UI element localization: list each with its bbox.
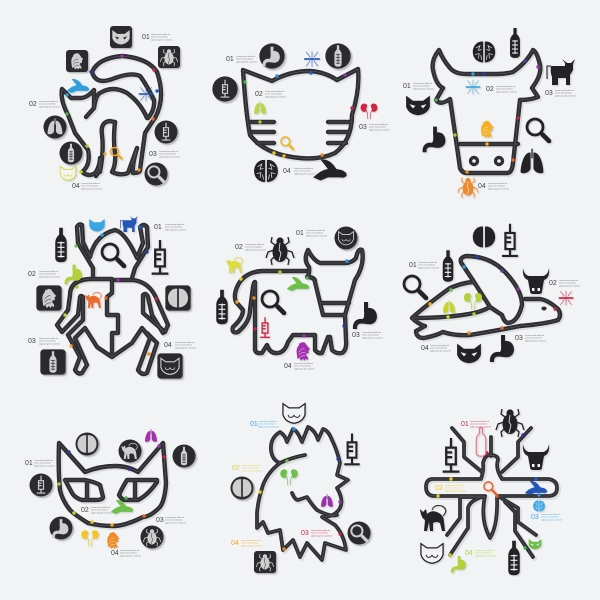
label 03: 03 — [545, 90, 553, 97]
label 03: adipiscing elit, nonumm — [541, 518, 562, 521]
panel: cow — [216, 226, 383, 370]
label 01 — [250, 420, 279, 428]
label 02: 02 — [435, 485, 443, 492]
label 02: Lorem ipsum dolor sit — [91, 506, 111, 509]
label 04: 04 — [283, 168, 291, 175]
label 02 — [486, 85, 517, 93]
label 01 — [409, 261, 439, 269]
label 01: 01 — [226, 56, 234, 63]
label 02: 02 — [486, 86, 494, 93]
icon: brain — [473, 42, 495, 62]
route markers — [63, 225, 158, 356]
label 03: amet, consectetuer — [555, 92, 572, 95]
label 01: 01 — [409, 262, 417, 269]
icon: lungs — [321, 494, 333, 507]
label 03 — [531, 513, 562, 521]
icon: stomach — [423, 127, 445, 152]
label 04 — [72, 182, 102, 190]
icon: rooster badge — [36, 285, 63, 312]
label 03 — [149, 150, 180, 158]
label 04: 04 — [111, 550, 119, 557]
label 01 — [296, 229, 327, 237]
label 04 — [465, 549, 496, 557]
icon: bottle badge — [60, 142, 84, 166]
icon: bottle — [216, 290, 228, 324]
label 03: amet, consectetuer — [369, 126, 386, 129]
label 02: Lorem ipsum dolor sit — [445, 484, 465, 487]
line drawing: rooster head — [257, 427, 350, 562]
label 01: amet, consectetuer — [258, 423, 275, 426]
icon: bottle outline — [476, 428, 486, 456]
icon: turtle — [111, 500, 133, 514]
label 01: Lorem ipsum dolor sit — [236, 55, 256, 58]
label 04: adipiscing elit, nonumm — [81, 187, 102, 190]
icon: stomach — [353, 302, 377, 329]
icon: mosquito — [304, 51, 320, 67]
label 03: adipiscing elit, nonumm — [525, 339, 546, 342]
label 02: amet, consectetuer — [496, 88, 513, 91]
label 01: amet, consectetuer — [413, 85, 430, 88]
label 03: adipiscing elit, nonumm — [362, 336, 383, 339]
label 04: amet, consectetuer — [430, 347, 447, 350]
label 03: Lorem ipsum dolor sit — [525, 334, 545, 337]
icon: cat face — [457, 344, 481, 363]
label 04: adipiscing elit, nonumm — [430, 349, 451, 352]
label 04 — [231, 539, 262, 547]
label 01: adipiscing elit, nonumm — [34, 464, 55, 467]
label 04: Lorem ipsum dolor sit — [488, 182, 508, 185]
label 01: 01 — [403, 83, 411, 90]
label 04: 04 — [421, 345, 429, 352]
label 02: amet, consectetuer — [265, 93, 282, 96]
label 02: adipiscing elit, nonumm — [445, 489, 466, 492]
line drawing: arched cat — [62, 56, 163, 178]
label 03: 03 — [28, 338, 36, 345]
icon: kidneys — [280, 469, 298, 485]
label 02: adipiscing elit, nonumm — [245, 248, 266, 251]
label 01: adipiscing elit, nonumm — [418, 266, 439, 269]
route markers — [243, 71, 354, 158]
label 02: amet, consectetuer — [245, 246, 262, 249]
label 04 — [478, 182, 509, 190]
icon: syringe — [152, 240, 168, 274]
icon: small magnifier — [484, 482, 496, 494]
label 03: adipiscing elit, nonumm — [165, 521, 186, 524]
icon: stomach — [490, 335, 514, 362]
label 04: adipiscing elit, nonumm — [475, 554, 496, 557]
label 03: adipiscing elit, nonumm — [555, 94, 576, 97]
icon: cat face — [406, 96, 430, 115]
label 04: 04 — [465, 550, 473, 557]
icon: magnifier — [527, 119, 549, 141]
icon: syringe — [443, 438, 459, 472]
label 01: amet, consectetuer — [165, 226, 182, 229]
icon: cat outline — [89, 219, 105, 232]
label 02 — [81, 506, 112, 514]
label 04: Lorem ipsum dolor sit — [81, 182, 101, 185]
label 03: adipiscing elit, nonumm — [159, 155, 180, 158]
label 04: amet, consectetuer — [241, 542, 258, 545]
icon: brain badge — [230, 476, 256, 502]
icon: bottle badge — [172, 444, 198, 470]
label 01 — [142, 33, 172, 41]
icon: stomach — [451, 556, 466, 573]
panel: beetle — [28, 216, 196, 380]
label 03: Lorem ipsum dolor sit — [541, 513, 561, 516]
label 03: amet, consectetuer — [541, 516, 558, 519]
icon: brain — [533, 500, 545, 511]
label 03 — [301, 529, 332, 537]
icon: magnifier badge — [348, 522, 372, 546]
icon: cat — [226, 257, 242, 273]
icon: bottle badge — [40, 349, 67, 376]
icon: stomach badge — [259, 43, 287, 71]
label 03: amet, consectetuer — [311, 532, 328, 535]
icon: bottle — [443, 250, 453, 282]
label 02: adipiscing elit, nonumm — [265, 95, 286, 98]
panel: cat head — [212, 43, 390, 182]
label 03: 03 — [515, 335, 523, 342]
label 01 — [461, 420, 491, 428]
label 02: Lorem ipsum dolor sit — [39, 270, 59, 273]
label 02 — [255, 90, 286, 98]
label 01: 01 — [461, 421, 469, 428]
icon: brain — [254, 160, 278, 182]
label 03 — [156, 516, 186, 524]
label 02: adipiscing elit, nonumm — [559, 284, 580, 287]
label 02: 02 — [81, 507, 89, 514]
icon: lungs — [443, 300, 455, 313]
icon: cat face — [529, 539, 541, 549]
label 04: amet, consectetuer — [294, 365, 311, 368]
icon: brain badge — [76, 432, 100, 458]
label 04: Lorem ipsum dolor sit — [120, 549, 140, 552]
label 01: adipiscing elit, nonumm — [165, 228, 186, 231]
icon: bottle — [508, 541, 520, 575]
icon: brain — [473, 227, 495, 247]
label 03: 03 — [359, 124, 367, 131]
icon: syringe — [344, 434, 360, 464]
label 03: 03 — [352, 332, 360, 339]
label 04: adipiscing elit, nonumm — [241, 544, 262, 547]
label 04: adipiscing elit, nonumm — [294, 172, 315, 175]
label 02 — [435, 484, 466, 492]
icon: lungs — [254, 101, 266, 114]
label 04: 04 — [231, 540, 239, 547]
label 02: Lorem ipsum dolor sit — [559, 279, 579, 282]
label 03: 03 — [156, 517, 164, 524]
label 03: 03 — [301, 530, 309, 537]
icon: brain badge — [165, 285, 192, 312]
route markers — [235, 259, 349, 338]
label 03: amet, consectetuer — [39, 340, 56, 343]
label 01: adipiscing elit, nonumm — [258, 425, 279, 428]
label 04: 04 — [72, 183, 80, 190]
icon: magnifier badge — [144, 162, 170, 188]
label 03: amet, consectetuer — [165, 519, 182, 522]
icon: bug — [496, 409, 524, 437]
icon: bug — [266, 237, 294, 265]
turtle eye — [541, 306, 547, 310]
icon: cat — [85, 292, 101, 308]
line drawing: mosquito — [426, 428, 558, 558]
label 04: Lorem ipsum dolor sit — [294, 362, 314, 365]
label 04: adipiscing elit, nonumm — [175, 346, 196, 349]
panel: cow head — [403, 28, 576, 198]
label 01: amet, consectetuer — [470, 423, 487, 426]
label 01: amet, consectetuer — [236, 58, 253, 61]
label 03: adipiscing elit, nonumm — [311, 534, 332, 537]
icon: stomach — [65, 265, 82, 284]
label 03: adipiscing elit, nonumm — [369, 128, 390, 131]
label 01 — [403, 82, 434, 90]
route markers — [57, 444, 166, 527]
icon: kidneys — [81, 530, 99, 546]
label 03: Lorem ipsum dolor sit — [311, 529, 331, 532]
label 01 — [154, 223, 186, 231]
icon: cat outline — [421, 544, 443, 563]
label 01: adipiscing elit, nonumm — [236, 60, 257, 63]
label 03: amet, consectetuer — [362, 334, 379, 337]
label 01: Lorem ipsum dolor sit — [413, 82, 433, 85]
icon: cat — [420, 506, 446, 531]
label 02: Lorem ipsum dolor sit — [265, 90, 285, 93]
panel: turtle — [404, 224, 580, 363]
icon: lungs — [145, 429, 157, 442]
label 01: adipiscing elit, nonumm — [151, 38, 172, 41]
label 04: Lorem ipsum dolor sit — [430, 344, 450, 347]
label 03 — [352, 331, 383, 339]
label 02 — [549, 279, 580, 287]
label 04: 04 — [164, 342, 172, 349]
icon: syringe badge — [154, 120, 180, 146]
label 02: 02 — [232, 465, 240, 472]
label 01: adipiscing elit, nonumm — [470, 425, 491, 428]
label 01: Lorem ipsum dolor sit — [418, 261, 438, 264]
label 04: amet, consectetuer — [475, 552, 492, 555]
label 02: 02 — [29, 101, 37, 108]
route markers — [434, 59, 540, 174]
icon: rooster — [481, 121, 494, 138]
icon: mosquito — [559, 291, 573, 305]
line drawing: cat head with whiskers — [243, 69, 360, 160]
icon: cat face badge — [110, 26, 134, 50]
label 01: 01 — [25, 460, 33, 467]
icon: small magnifier — [281, 137, 293, 149]
icon: syringe — [502, 224, 518, 256]
line drawing: turtle — [412, 256, 562, 340]
icon: rooster — [297, 342, 310, 361]
label 03 — [359, 123, 390, 131]
icon: cat outline — [60, 166, 76, 180]
label 02: amet, consectetuer — [39, 103, 56, 106]
label 02: Lorem ipsum dolor sit — [496, 85, 516, 88]
label 01: Lorem ipsum dolor sit — [258, 420, 278, 423]
panel: mosquito — [420, 409, 562, 575]
icon: cow head — [523, 444, 549, 470]
icon: kidneys — [361, 103, 377, 119]
icon: cat outline — [283, 404, 305, 423]
icon: cat outline badge — [334, 226, 360, 252]
label 04: Lorem ipsum dolor sit — [175, 341, 195, 344]
icon: small magnifier — [110, 148, 122, 158]
label 04: amet, consectetuer — [294, 170, 311, 173]
route markers — [65, 54, 159, 174]
label 01: Lorem ipsum dolor sit — [151, 33, 171, 36]
label 04: adipiscing elit, nonumm — [120, 554, 141, 557]
icon: syringe badge — [30, 474, 54, 498]
icon: bug — [458, 178, 478, 198]
icon: magnifier — [262, 291, 284, 313]
label 03: Lorem ipsum dolor sit — [165, 516, 185, 519]
icon: lungs — [521, 149, 543, 173]
label 02: Lorem ipsum dolor sit — [242, 464, 262, 467]
label 03: amet, consectetuer — [525, 337, 542, 340]
label 01: Lorem ipsum dolor sit — [306, 229, 326, 232]
icon: cow — [547, 59, 575, 85]
label 01: Lorem ipsum dolor sit — [470, 420, 490, 423]
line drawing: cat face — [59, 443, 167, 528]
label 04: adipiscing elit, nonumm — [488, 187, 509, 190]
label 02: adipiscing elit, nonumm — [496, 90, 517, 93]
label 01: amet, consectetuer — [306, 232, 323, 235]
label 02: 02 — [28, 271, 36, 278]
label 01: Lorem ipsum dolor sit — [34, 459, 54, 462]
label 02: amet, consectetuer — [39, 273, 56, 276]
label 04: 04 — [284, 363, 292, 370]
icon: syringe — [260, 317, 270, 337]
label 04 — [164, 341, 196, 349]
label 02: adipiscing elit, nonumm — [91, 511, 112, 514]
route markers — [428, 255, 557, 335]
label 01: amet, consectetuer — [151, 36, 168, 39]
label 02: 02 — [549, 280, 557, 287]
label 02: amet, consectetuer — [559, 282, 576, 285]
icon: turtle — [313, 159, 347, 180]
label 04: Lorem ipsum dolor sit — [241, 539, 261, 542]
icon: magnifier — [102, 244, 124, 266]
label 03: amet, consectetuer — [159, 153, 176, 156]
panel: cat arch — [29, 26, 182, 190]
label 02: adipiscing elit, nonumm — [39, 105, 60, 108]
label 02: adipiscing elit, nonumm — [242, 469, 263, 472]
label 01: amet, consectetuer — [34, 462, 51, 465]
icon: magnifier — [404, 276, 426, 298]
label 04: Lorem ipsum dolor sit — [475, 549, 495, 552]
route markers — [258, 427, 342, 551]
label 04: adipiscing elit, nonumm — [294, 367, 315, 370]
line drawing: beetle — [57, 224, 170, 376]
icon: syringe badge — [212, 76, 240, 104]
label 01: 01 — [142, 34, 150, 41]
label 02: adipiscing elit, nonumm — [39, 275, 60, 278]
label 01: Lorem ipsum dolor sit — [165, 223, 185, 226]
label 01: adipiscing elit, nonumm — [306, 234, 327, 237]
icon: lungs badge — [44, 116, 68, 140]
label 01: 01 — [250, 421, 258, 428]
line drawing: cow head — [433, 50, 542, 174]
label 03: Lorem ipsum dolor sit — [159, 150, 179, 153]
label 02 — [29, 100, 60, 108]
label 02: Lorem ipsum dolor sit — [39, 100, 59, 103]
icon: cat badge — [118, 440, 144, 464]
icon: cat outline badge — [157, 353, 184, 380]
label 02: amet, consectetuer — [445, 487, 462, 490]
label 03 — [545, 89, 576, 97]
label 04: Lorem ipsum dolor sit — [294, 167, 314, 170]
label 01: amet, consectetuer — [418, 264, 435, 267]
label 04 — [111, 549, 141, 557]
label 03: 03 — [149, 151, 157, 158]
icon: bottle — [510, 28, 520, 58]
label 04 — [421, 344, 451, 352]
label 03 — [28, 337, 60, 345]
label 04: amet, consectetuer — [81, 185, 98, 188]
cow nostrils — [470, 158, 502, 164]
label 04: amet, consectetuer — [488, 185, 505, 188]
label 02: 02 — [235, 244, 243, 251]
icon: turtle — [287, 277, 309, 291]
icon: turtle — [67, 79, 89, 93]
icon: turtle — [525, 481, 547, 495]
label 04 — [283, 167, 315, 175]
label 02: amet, consectetuer — [91, 509, 108, 512]
label 02 — [235, 243, 266, 251]
icon: mosquito — [139, 87, 153, 101]
icon: mosquito — [466, 80, 480, 94]
route markers — [436, 433, 541, 557]
label 04 — [284, 362, 315, 370]
icon: bottle badge — [325, 43, 353, 71]
label 04: amet, consectetuer — [175, 344, 192, 347]
label 01: 01 — [154, 224, 162, 231]
icon: stomach badge — [50, 516, 74, 542]
label 03: Lorem ipsum dolor sit — [39, 337, 59, 340]
line drawing: cow — [233, 250, 364, 355]
icon: bug badge — [140, 526, 166, 550]
icon: cow — [120, 216, 138, 232]
label 02: amet, consectetuer — [242, 467, 259, 470]
label 03: Lorem ipsum dolor sit — [555, 89, 575, 92]
label 03: adipiscing elit, nonumm — [39, 342, 60, 345]
label 02: 02 — [255, 91, 263, 98]
label 03: Lorem ipsum dolor sit — [369, 123, 389, 126]
icon: kidneys — [464, 293, 482, 310]
label 02 — [28, 270, 60, 278]
label 01 — [226, 55, 257, 63]
icon: cow head — [523, 268, 549, 294]
icon: bug badge — [158, 46, 182, 70]
icon: bug badge — [254, 551, 278, 574]
panel: rooster — [230, 404, 372, 574]
label 04: 04 — [478, 183, 486, 190]
label 03: Lorem ipsum dolor sit — [362, 331, 382, 334]
label 01: 01 — [296, 230, 304, 237]
icon: rooster badge — [66, 50, 90, 74]
panel: cat face — [25, 429, 198, 557]
label 02: Lorem ipsum dolor sit — [245, 243, 265, 246]
label 03 — [515, 334, 546, 342]
label 04: amet, consectetuer — [120, 552, 137, 555]
icon: rooster — [107, 532, 119, 549]
icon: bottle — [55, 228, 67, 262]
label 03: 03 — [531, 514, 539, 521]
label 01 — [25, 459, 55, 467]
label 02 — [232, 464, 263, 472]
label 01: adipiscing elit, nonumm — [413, 87, 434, 90]
